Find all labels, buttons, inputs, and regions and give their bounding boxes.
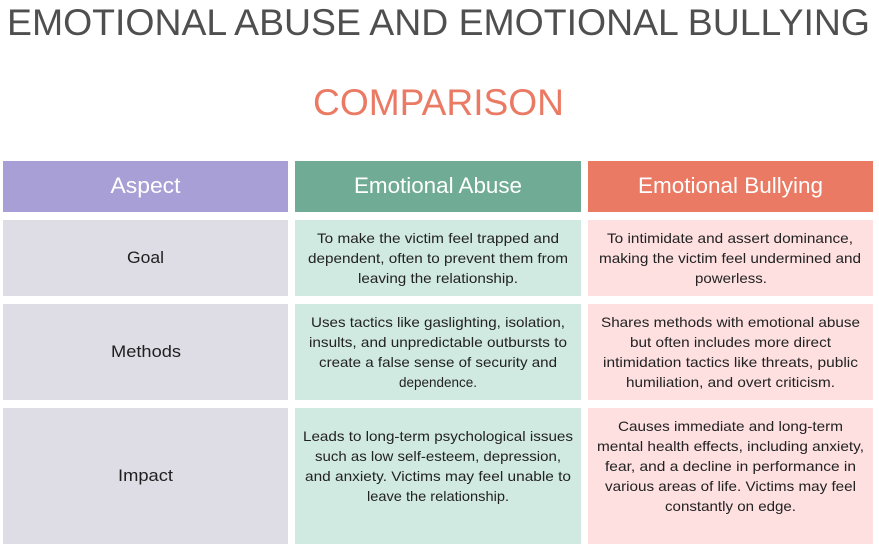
- header: aspect: Aspect: [110, 173, 180, 198]
- methods: emotional abuse: dependence.: [399, 374, 477, 390]
- impact: emotional abuse: and anxiety. Victims may feel unable to: [305, 468, 571, 484]
- title: [7, 1, 870, 123]
- methods: emotional bullying: [588, 304, 873, 400]
- impact: emotional bullying: Causes immediate and long-term: [618, 418, 843, 434]
- goal: emotional bullying: [588, 220, 873, 296]
- row label: methods: [3, 304, 288, 400]
- title: EMOTIONAL ABUSE AND EMOTIONAL BULLYING: [7, 1, 870, 43]
- row label: goal: Goal: [127, 249, 164, 267]
- header: aspect: [3, 161, 288, 212]
- header: emotional abuse: Emotional Abuse: [354, 173, 522, 198]
- header: emotional abuse: [295, 161, 581, 212]
- comparison table: [3, 161, 873, 544]
- goal: emotional abuse: To make the victim feel trapped and: [317, 230, 559, 246]
- subtitle: COMPARISON: [313, 81, 564, 123]
- impact: emotional abuse: [295, 408, 581, 544]
- methods: emotional bullying: intimidation tactics like threats, public: [603, 354, 858, 370]
- header: emotional bullying: [588, 161, 873, 212]
- row label: impact: [3, 408, 288, 544]
- goal: emotional abuse: [295, 220, 581, 296]
- goal: emotional abuse: leaving the relationship.: [358, 270, 518, 286]
- impact: emotional bullying: mental health effects, including anxiety,: [597, 438, 864, 454]
- methods: emotional bullying: but often includes more direct: [630, 334, 831, 350]
- impact: emotional bullying: [588, 408, 873, 544]
- header: emotional bullying: Emotional Bullying: [638, 173, 823, 198]
- impact: emotional bullying: various areas of life. Victims may feel: [605, 478, 856, 494]
- goal: emotional bullying: To intimidate and assert dominance,: [607, 230, 853, 246]
- methods: emotional bullying: Shares methods with emotional abuse: [601, 314, 860, 330]
- methods: emotional abuse: insults, and unpredictable outbursts to: [309, 334, 567, 350]
- methods: emotional bullying: humiliation, and overt criticism.: [626, 374, 835, 390]
- goal: emotional bullying: making the victim feel undermined and: [599, 250, 861, 266]
- impact: emotional abuse: such as low self-esteem, depression,: [315, 448, 561, 464]
- row label: impact: Impact: [118, 467, 173, 485]
- impact: emotional abuse: Leads to long-term psychological issues: [303, 428, 573, 444]
- methods: emotional abuse: create a false sense of security and: [319, 354, 557, 370]
- impact: emotional bullying: constantly on edge.: [665, 498, 796, 514]
- goal: emotional bullying: powerless.: [695, 270, 767, 286]
- impact: emotional abuse: leave the relationship.: [367, 488, 509, 504]
- goal: emotional abuse: dependent, often to prevent them from: [308, 250, 568, 266]
- impact: emotional bullying: fear, and a decline in performance in: [605, 458, 856, 474]
- methods: emotional abuse: Uses tactics like gaslighting, isolation,: [311, 314, 565, 330]
- row label: goal: [3, 220, 288, 296]
- methods: emotional abuse: [295, 304, 581, 400]
- row label: methods: Methods: [111, 343, 181, 361]
